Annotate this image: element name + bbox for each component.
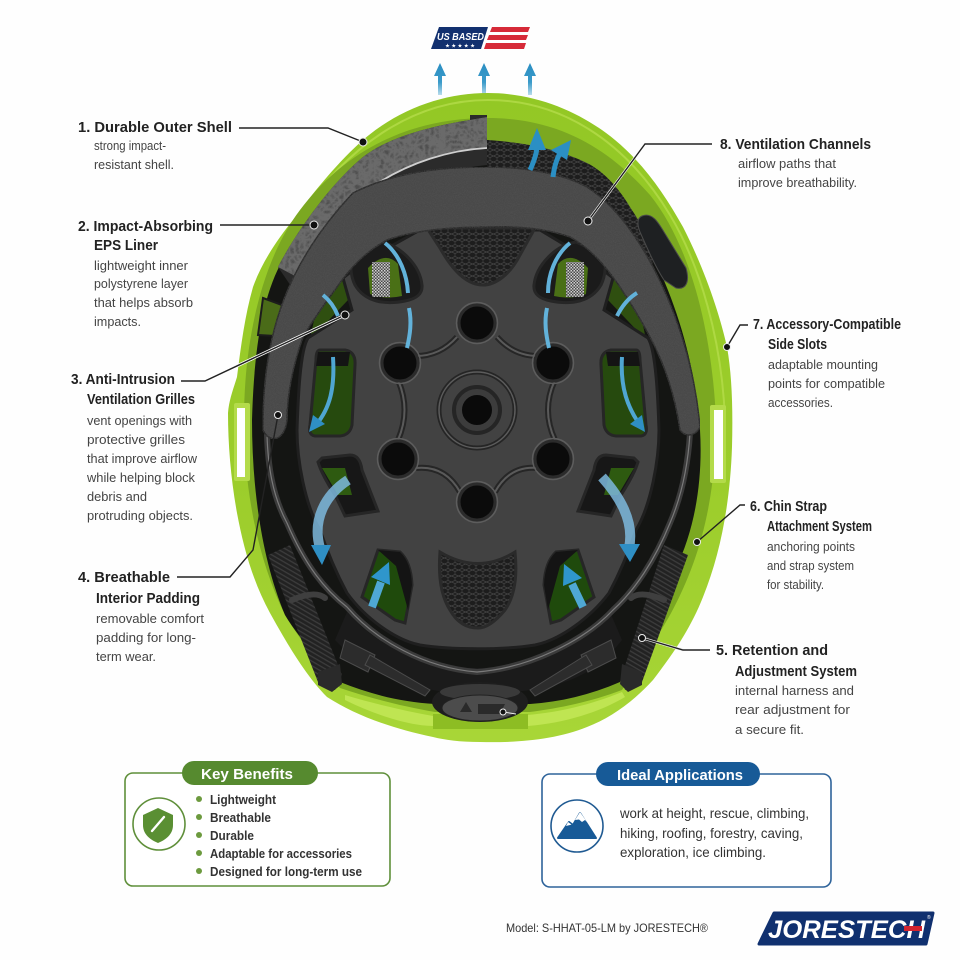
webbing straps <box>268 545 688 692</box>
label 2: Impact-Absorbing EPS Liner: EPS Liner <box>94 237 158 254</box>
shell interior recess <box>244 118 716 712</box>
right vents <box>534 242 646 623</box>
top insert <box>427 228 535 285</box>
benefits list: Breathable <box>210 811 271 825</box>
label 2: Impact-Absorbing EPS Liner: polystyrene layer <box>94 277 188 291</box>
comfort padding ring <box>263 167 700 439</box>
central foam pad <box>297 230 659 649</box>
leader 5 <box>638 634 710 650</box>
leader 3 <box>181 311 349 381</box>
EPS liner wedge <box>278 115 487 295</box>
inner harness dark strip <box>335 612 622 694</box>
logo: JORESTECH: JORESTECH <box>768 916 926 944</box>
rear adjustment dial <box>432 682 528 722</box>
label 3: Anti-Intrusion Ventilation Grilles: vent openings with <box>87 414 192 428</box>
interior dark base <box>252 140 701 704</box>
label 3: Anti-Intrusion Ventilation Grilles: while helping block <box>86 471 196 485</box>
label 3: Anti-Intrusion Ventilation Grilles <box>71 371 198 523</box>
heading pill: Ideal Applications: Ideal Applications <box>617 767 743 784</box>
left vents <box>310 242 422 623</box>
label 2: Impact-Absorbing EPS Liner: 2. Impact-Absorbing <box>78 218 213 235</box>
label 1: Durable Outer Shell <box>78 119 232 172</box>
label 6: Chin Strap Attachment System: and strap system <box>767 559 854 573</box>
heading pill: Ideal Applications <box>596 762 760 786</box>
label 8: Ventilation Channels <box>720 136 871 190</box>
label 7: Accessory-Compatible Side Slots: accessories. <box>768 396 833 410</box>
leader 8 <box>584 144 712 225</box>
badge: US Based flag <box>431 27 530 50</box>
label 7: Accessory-Compatible Side Slots <box>753 316 901 410</box>
vent background green patches <box>310 275 646 340</box>
raised channels on pad <box>398 337 555 492</box>
label 7: Accessory-Compatible Side Slots: 7. Accessory-Compatible <box>753 316 901 333</box>
helmet outer shell <box>228 93 732 742</box>
label 3: Anti-Intrusion Ventilation Grilles: 3. Anti-Intrusion <box>71 371 175 388</box>
label 3: Anti-Intrusion Ventilation Grilles: protruding objects. <box>87 509 193 523</box>
shell rim highlight <box>300 100 725 420</box>
panel: Key Benefits <box>125 761 390 886</box>
label 6: Chin Strap Attachment System: for stability. <box>767 578 824 592</box>
label 8: Ventilation Channels: airflow paths that <box>738 157 837 171</box>
label 2: Impact-Absorbing EPS Liner <box>78 218 213 329</box>
label 6: Chin Strap Attachment System: 6. Chin Strap <box>750 498 827 515</box>
airflow arrows <box>309 128 645 607</box>
label 2: Impact-Absorbing EPS Liner: lightweight inner <box>94 259 188 273</box>
leader 7 <box>724 325 748 350</box>
label 5: Retention and Adjustment System <box>716 642 857 737</box>
label 5: Retention and Adjustment System: a secure fit. <box>735 723 804 737</box>
panel: Ideal Applications <box>542 762 831 887</box>
label 1: Durable Outer Shell: resistant shell. <box>94 158 174 172</box>
helmet illustration <box>228 93 732 742</box>
label 1: Durable Outer Shell: 1. Durable Outer Shell <box>78 119 232 136</box>
left clip <box>258 298 282 336</box>
label 5: Retention and Adjustment System: 5. Retention and <box>716 642 828 659</box>
arrow: airflow exiting top <box>434 63 536 95</box>
benefits list <box>196 793 362 879</box>
benefits list: Designed for long-term use <box>210 865 362 879</box>
leader 6 <box>694 505 745 546</box>
label 6: Chin Strap Attachment System <box>750 498 872 592</box>
benefits list: Durable <box>210 829 254 843</box>
side slots <box>234 403 726 483</box>
label 4: Breathable Interior Padding: 4. Breathable <box>78 569 170 586</box>
label 4: Breathable Interior Padding: removable comfort <box>96 612 205 626</box>
benefits list: Lightweight <box>210 793 277 807</box>
leader 1 <box>239 128 367 146</box>
model caption: Model: S-HHAT-05-LM by JORESTECH® <box>506 921 708 935</box>
label 3: Anti-Intrusion Ventilation Grilles: Ventilation Grilles <box>87 391 195 408</box>
label 7: Accessory-Compatible Side Slots: Side Slots <box>768 336 827 353</box>
label 5: Retention and Adjustment System: internal harness and <box>735 684 854 698</box>
label 7: Accessory-Compatible Side Slots: points for compatible <box>768 377 885 391</box>
label 6: Chin Strap Attachment System: Attachment System <box>767 518 872 535</box>
retention band <box>267 433 690 672</box>
bottom band highlight <box>345 692 625 726</box>
applications text <box>619 805 809 860</box>
label 1: Durable Outer Shell: strong impact- <box>94 139 166 153</box>
benefits list: Adaptable for accessories <box>210 847 352 861</box>
applications text: hiking, roofing, forestry, caving, <box>620 825 803 841</box>
label 5: Retention and Adjustment System: rear adjustment for <box>735 703 850 717</box>
label 3: Anti-Intrusion Ventilation Grilles: that improve airflow <box>87 452 198 466</box>
label 4: Breathable Interior Padding <box>78 569 205 664</box>
label 3: Anti-Intrusion Ventilation Grilles: debris and <box>87 490 147 504</box>
pad holes <box>378 302 574 522</box>
icon: mountain <box>551 800 603 852</box>
label 8: Ventilation Channels: improve breathability. <box>738 176 857 190</box>
applications text: exploration, ice climbing. <box>620 844 766 860</box>
logo: JORESTECH: ® <box>927 914 931 921</box>
heading pill: Key Benefits <box>182 761 318 785</box>
bottom insert <box>439 552 516 628</box>
label 2: Impact-Absorbing EPS Liner: that helps absorb <box>94 296 193 310</box>
retention strap pieces <box>340 640 616 696</box>
label 6: Chin Strap Attachment System: anchoring points <box>767 540 855 554</box>
right textured liner <box>487 140 656 290</box>
airflow curves in vents <box>323 243 637 348</box>
label 5: Retention and Adjustment System: Adjustment System <box>735 663 857 680</box>
bottom band notch <box>433 714 528 729</box>
badge: US Based flag: US BASED <box>437 32 484 43</box>
icon: shield <box>133 798 185 850</box>
label 4: Breathable Interior Padding: Interior Padding <box>96 590 200 607</box>
accessory clip <box>638 215 688 288</box>
leader 2 <box>220 221 318 229</box>
label 8: Ventilation Channels: 8. Ventilation Channels <box>720 136 871 153</box>
leader 4 <box>177 412 282 577</box>
applications text: work at height, rescue, climbing, <box>619 805 809 821</box>
label 4: Breathable Interior Padding: term wear. <box>96 650 156 664</box>
heading pill: Key Benefits: Key Benefits <box>201 766 293 783</box>
leader: dial marker <box>500 709 516 715</box>
label 7: Accessory-Compatible Side Slots: adaptable mounting <box>768 358 878 372</box>
label 2: Impact-Absorbing EPS Liner: impacts. <box>94 315 141 329</box>
label 3: Anti-Intrusion Ventilation Grilles: protective grilles <box>87 433 185 447</box>
badge: US Based flag: ★★★★★ <box>445 42 475 50</box>
label 4: Breathable Interior Padding: padding for long- <box>96 631 196 645</box>
